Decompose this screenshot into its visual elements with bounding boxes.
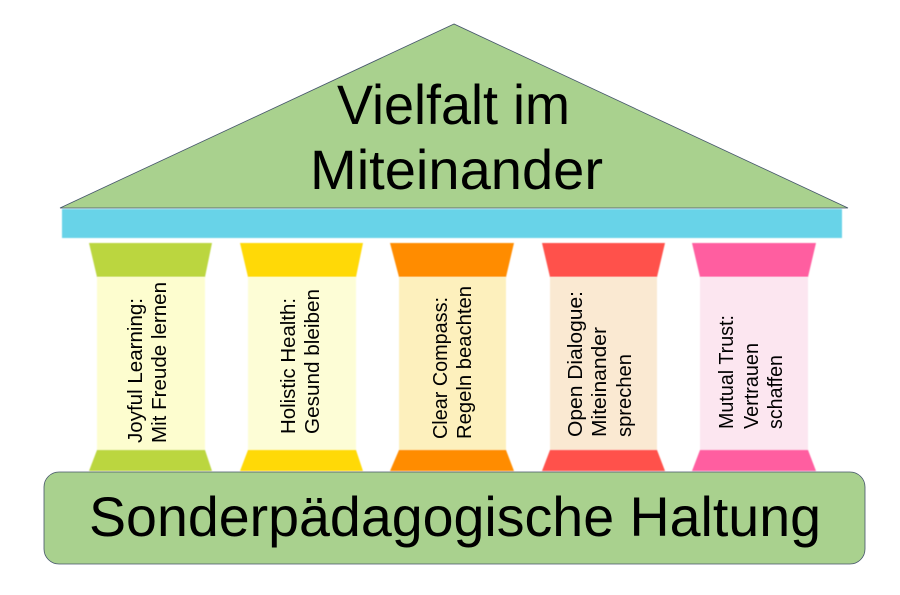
pillar 2 text: Holistic Health: xyxy=(278,298,300,434)
pillar 3: Clear Compass xyxy=(390,243,514,471)
pillar 1 text: Joyful Learning: xyxy=(125,298,147,443)
pillar 5 text xyxy=(716,315,787,429)
pillar 5 text: schaffen xyxy=(765,355,787,429)
roof title: Miteinander xyxy=(310,138,603,201)
pillar 5 text: Mutual Trust: xyxy=(716,315,738,429)
pillar 4 text: Miteinander xyxy=(589,327,611,437)
pillar 4 text: Open Dialogue: xyxy=(565,291,587,437)
pillar 5 text: Vertrauen xyxy=(741,343,763,429)
pillar 2 text xyxy=(278,289,324,434)
foundation title: Sonderpädagogische Haltung xyxy=(89,485,821,548)
pillar 4: Open Dialogue xyxy=(542,243,665,471)
pillar 4 text xyxy=(565,291,636,437)
roof title xyxy=(310,73,603,201)
foundation xyxy=(44,472,865,564)
pillar 3 text: Regeln beachten xyxy=(454,286,476,439)
pillar 2: Holistic Health xyxy=(240,243,363,471)
pillar 2 text: Gesund bleiben xyxy=(302,289,324,434)
roof xyxy=(60,24,848,208)
pillar 1 text: Mit Freude lernen xyxy=(149,282,171,443)
pillar 3 text: Clear Compass: xyxy=(430,297,452,439)
beam xyxy=(62,209,842,238)
pillar 1: Joyful Learning xyxy=(89,243,212,471)
pillar 4 text: sprechen xyxy=(614,354,636,437)
pillar 5: Mutual Trust xyxy=(692,243,816,471)
roof title: Vielfalt im xyxy=(337,73,570,136)
pillar 3 text xyxy=(430,286,476,439)
pillar 1 text xyxy=(125,282,171,443)
